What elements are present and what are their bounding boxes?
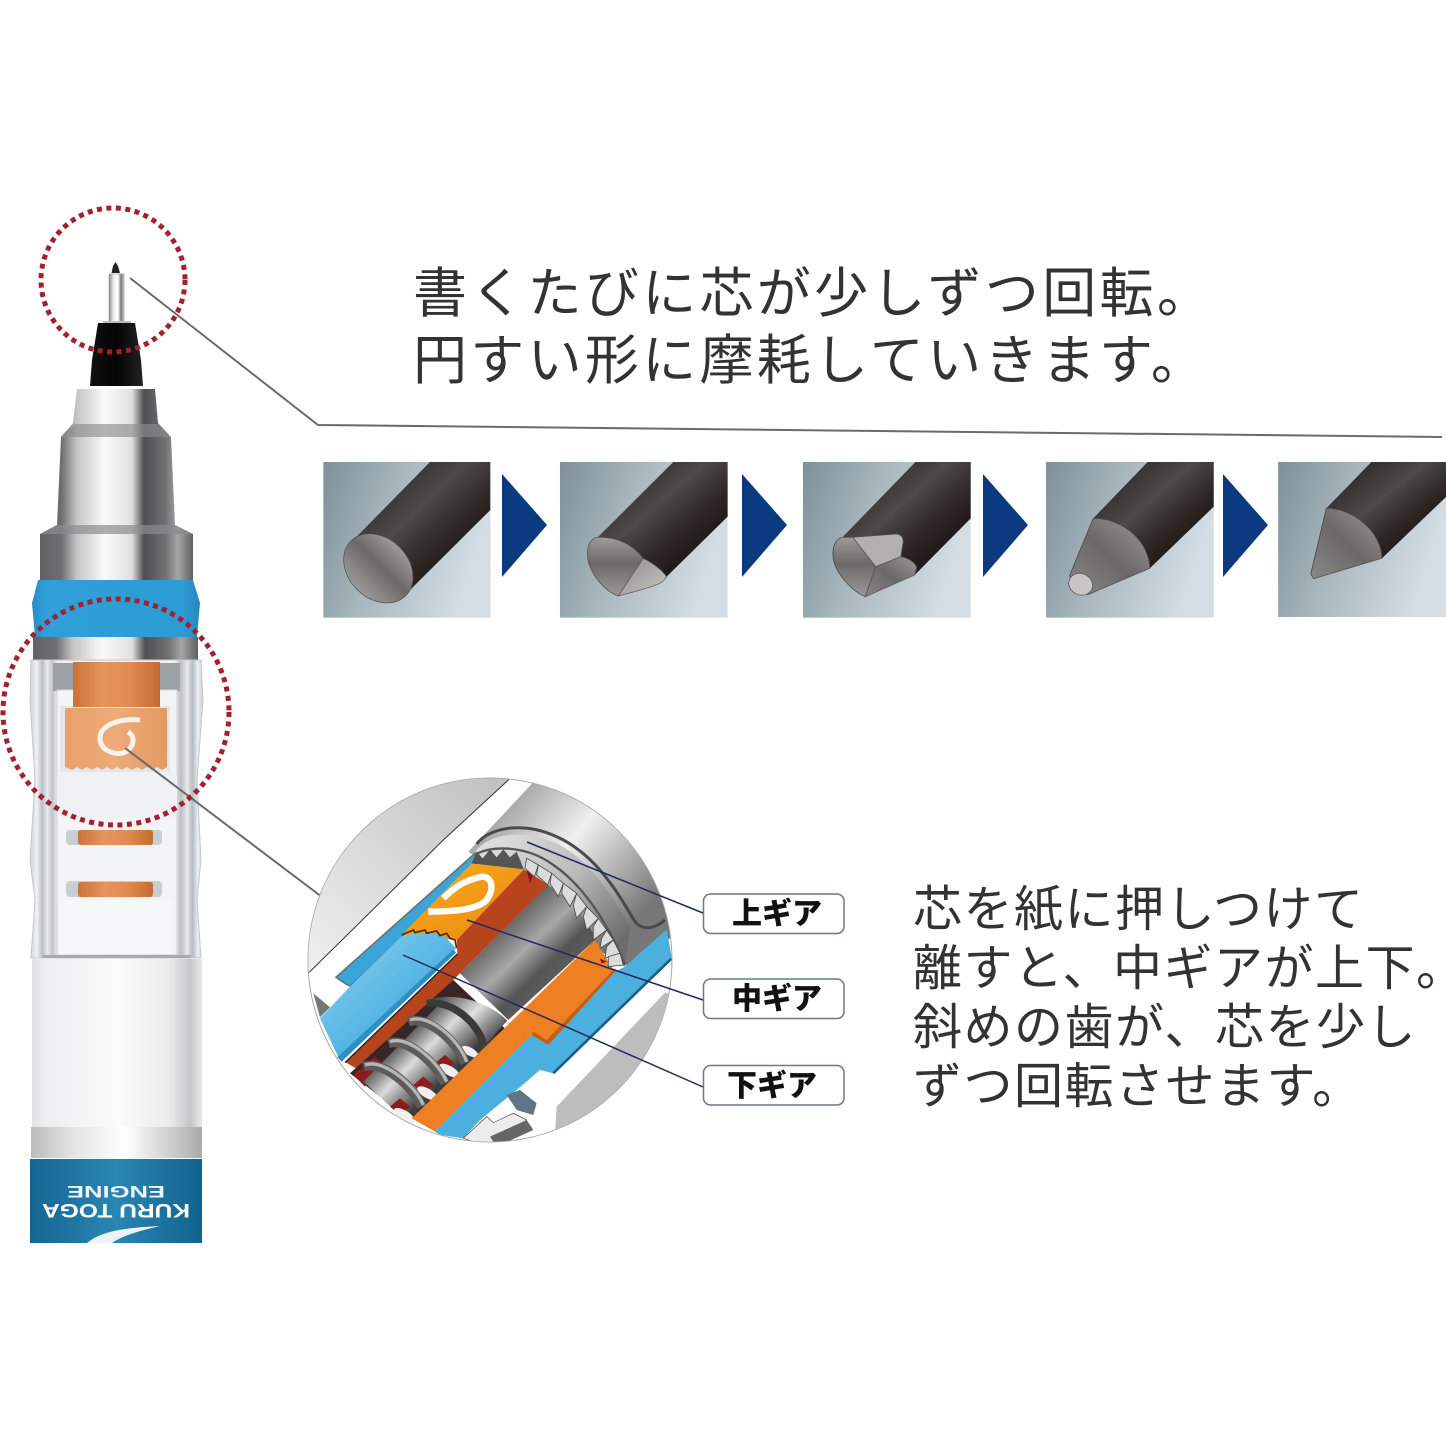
bottom thread details bbox=[462, 1090, 547, 1142]
blue barrel with inverted logo bbox=[30, 1159, 202, 1243]
inner ring bbox=[467, 835, 630, 967]
label: middle gear: 中ギア bbox=[732, 974, 822, 1018]
white wall notch bbox=[346, 985, 350, 988]
leader line: gear to cutaway bbox=[125, 748, 322, 897]
gray wall corner bbox=[313, 993, 330, 1017]
gear label leader lines bbox=[403, 842, 703, 1087]
red dotted circle: tip bbox=[41, 208, 185, 352]
dark blue strip bbox=[553, 958, 672, 1073]
arrow 2 bbox=[742, 474, 787, 577]
slot window 2 bbox=[66, 881, 162, 897]
lead panel 2: first facet bbox=[560, 462, 728, 618]
white barrel bbox=[32, 959, 202, 1127]
yellow gear logo bbox=[428, 877, 491, 912]
piston head bbox=[430, 997, 507, 1047]
arrow 4 bbox=[1223, 474, 1268, 577]
coils bbox=[363, 1021, 465, 1107]
arrow 3 bbox=[983, 474, 1028, 577]
lower right shell gray bbox=[555, 992, 668, 1130]
heading text: lead rotation: 円すい形に摩耗していきます。 bbox=[413, 316, 1208, 395]
orange middle gear bbox=[65, 708, 167, 770]
blue shell strip bbox=[336, 853, 477, 987]
lower blue shell bbox=[435, 929, 672, 1138]
white washers bbox=[394, 1108, 414, 1122]
metal collar bbox=[40, 389, 193, 581]
blue barrel with inverted logo: ENGINE bbox=[67, 1182, 165, 1201]
pencil illustration bbox=[30, 262, 203, 1243]
light blue lower gear bbox=[320, 933, 456, 1059]
red spring gaps bbox=[390, 1098, 410, 1110]
lower orange gear bbox=[412, 940, 615, 1132]
arrow 1 bbox=[502, 474, 547, 577]
black pencil nose bbox=[90, 323, 143, 386]
blue barrel with inverted logo: KURU TOGA bbox=[42, 1199, 190, 1220]
lead panel 5: sharp cone bbox=[1278, 462, 1446, 618]
red dotted circle: gear bbox=[3, 599, 229, 825]
drum shadow line bbox=[43, 955, 191, 958]
lead panel 3: multiple facets bbox=[803, 462, 971, 618]
dark tube edge bbox=[345, 954, 457, 1063]
leader line: tip to lead sequence bbox=[130, 278, 1442, 437]
explanation text bbox=[913, 870, 1446, 1118]
silver sleeve bbox=[468, 784, 670, 966]
blue strip under gear bbox=[337, 949, 456, 1062]
label: lower gear: 下ギア bbox=[727, 1061, 817, 1105]
explanation text: 芯を紙に押しつけて bbox=[913, 870, 1365, 941]
gear mesh line bbox=[402, 930, 457, 948]
heading text: lead rotation: 書くたびに芯が少しずつ回転。 bbox=[413, 249, 1214, 328]
inner ring dark arc bbox=[475, 848, 625, 965]
top gear small teeth bbox=[472, 849, 524, 869]
white inner drum bbox=[60, 900, 172, 954]
spring shaft bbox=[363, 997, 497, 1122]
silver barrel band bbox=[31, 1127, 202, 1158]
gear teeth ring bbox=[525, 858, 623, 967]
orange upper gear bbox=[73, 662, 160, 707]
label: upper gear: 上ギア bbox=[732, 889, 822, 933]
pencil tip sleeve and lead bbox=[103, 262, 131, 324]
piston dark ring bbox=[427, 1003, 484, 1045]
white lower gear drum bbox=[57, 772, 177, 818]
brown inner tube bbox=[345, 869, 548, 1072]
transparent grip section bbox=[30, 660, 203, 958]
lead wear sequence bbox=[323, 462, 1446, 618]
lead panel 4: blunt cone bbox=[1046, 462, 1214, 618]
silver ring under band bbox=[33, 637, 198, 662]
explanation text: ずつ回転させます。 bbox=[913, 1047, 1363, 1118]
explanation text: 斜めの歯が、芯を少し bbox=[913, 988, 1417, 1059]
logo mark bbox=[100, 720, 140, 753]
slot window 1 bbox=[66, 830, 162, 845]
gray shaft cylinder bbox=[460, 885, 597, 1020]
yellow middle gear bbox=[402, 863, 524, 940]
lead panel 1: flat end bbox=[323, 462, 490, 618]
label: upper gear bbox=[704, 889, 844, 934]
spring cavity bbox=[350, 980, 507, 1125]
label: middle gear bbox=[704, 974, 844, 1018]
sleeve groove bbox=[477, 828, 665, 928]
cutaway detail circle bbox=[300, 770, 683, 1153]
blue band bbox=[32, 580, 200, 637]
outer shell gray bbox=[300, 770, 508, 977]
heading text: lead rotation bbox=[413, 249, 1214, 395]
red tooth gaps bbox=[527, 870, 533, 883]
label: lower gear bbox=[704, 1061, 844, 1105]
orange gear side bbox=[532, 968, 617, 1045]
